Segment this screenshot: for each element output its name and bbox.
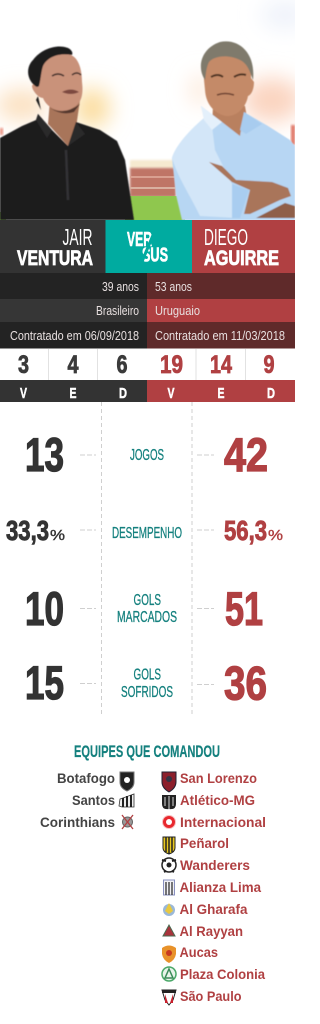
name: Jair Ventura bbox=[17, 224, 93, 270]
hire date bbox=[10, 329, 285, 343]
record numbers: Jair Ventura bbox=[18, 351, 128, 379]
nationality bbox=[96, 304, 200, 318]
record numbers: Jair Ventura: 3 bbox=[18, 351, 29, 379]
hire date: Contratado em 06/09/2018 bbox=[10, 329, 139, 343]
team: Botafogo: Botafogo bbox=[57, 770, 115, 786]
photo header: coaches over stadium bbox=[0, 1, 309, 220]
record numbers: Diego Aguirre: 14 bbox=[210, 351, 232, 379]
record numbers: Diego Aguirre: 19 bbox=[160, 351, 183, 379]
age bbox=[102, 280, 192, 294]
stat: desempenho: 33,3 bbox=[6, 515, 49, 546]
stat: gols sofridos: 36 bbox=[224, 656, 267, 710]
team: Al Rayyan: Al Rayyan bbox=[180, 923, 243, 939]
stat: desempenho: DESEMPENHO bbox=[112, 525, 182, 542]
stat: desempenho bbox=[6, 515, 283, 546]
name: Jair Ventura: VENTURA bbox=[17, 247, 93, 270]
team: Atlético-MG: Atlético-MG bbox=[180, 792, 255, 808]
record labels bbox=[20, 385, 275, 402]
team: Aucas bbox=[162, 944, 218, 963]
stat: gols marcados: 51 bbox=[225, 582, 263, 635]
record labels: V bbox=[20, 385, 27, 402]
stat: gols marcados: MARCADOS bbox=[117, 609, 177, 626]
record labels: E bbox=[218, 385, 224, 402]
photo: Jair Ventura bbox=[0, 46, 134, 220]
versus badge bbox=[127, 228, 168, 266]
record labels: E bbox=[70, 385, 76, 402]
stat: gols sofridos: 15 bbox=[25, 656, 64, 709]
versus badge: VER bbox=[127, 229, 152, 251]
stat: gols marcados: 10 bbox=[25, 582, 64, 635]
stadium background bbox=[0, 1, 309, 220]
stat: gols marcados: GOLS bbox=[134, 592, 161, 609]
record numbers: Diego Aguirre bbox=[160, 351, 274, 379]
record labels: V bbox=[168, 385, 174, 402]
team: Plaza Colonia: Plaza Colonia bbox=[180, 966, 265, 982]
nationality: Uruguaio bbox=[155, 304, 200, 318]
team: San Lorenzo: San Lorenzo bbox=[180, 770, 257, 786]
record numbers: Diego Aguirre: 9 bbox=[264, 351, 274, 379]
team: Alianza Lima: Alianza Lima bbox=[180, 879, 261, 895]
record labels: D bbox=[119, 385, 127, 402]
stat: desempenho: 56,3 bbox=[224, 515, 267, 546]
team: Peñarol bbox=[163, 835, 229, 854]
stat: gols sofridos: GOLS bbox=[134, 666, 161, 684]
team list: Jair Ventura bbox=[40, 770, 134, 830]
team: Aucas: Aucas bbox=[180, 944, 218, 960]
age: 53 anos bbox=[155, 280, 192, 294]
team: Internacional: Internacional bbox=[180, 814, 266, 830]
versus badge: SUS bbox=[142, 244, 168, 266]
team: São Paulo: São Paulo bbox=[180, 988, 242, 1004]
stat: jogos: JOGOS bbox=[130, 447, 164, 464]
stat: desempenho: % bbox=[50, 527, 65, 544]
stat: gols sofridos: SOFRIDOS bbox=[121, 684, 173, 701]
team: São Paulo bbox=[162, 988, 242, 1005]
name: Diego Aguirre: DIEGO bbox=[204, 224, 248, 250]
team: Peñarol: Peñarol bbox=[180, 835, 229, 851]
record numbers: Jair Ventura: 4 bbox=[68, 351, 79, 379]
name banner bbox=[0, 220, 295, 273]
nationality: Brasileiro bbox=[96, 304, 139, 318]
heading: teams coached: EQUIPES QUE COMANDOU bbox=[74, 743, 220, 761]
team: Santos: Santos bbox=[72, 792, 115, 808]
stat: desempenho: % bbox=[268, 527, 283, 544]
team: Wanderers: Wanderers bbox=[180, 857, 250, 873]
stat: jogos: 42 bbox=[224, 428, 268, 481]
age: 39 anos bbox=[102, 280, 139, 294]
biography table bbox=[0, 273, 295, 348]
record numbers: Jair Ventura: 6 bbox=[116, 351, 128, 379]
team: Al Gharafa: Al Gharafa bbox=[180, 901, 248, 917]
name: Diego Aguirre bbox=[204, 224, 279, 270]
stat: gols marcados bbox=[25, 582, 263, 635]
win, draw, loss record bbox=[0, 349, 295, 402]
team: Corinthians: Corinthians bbox=[40, 814, 115, 830]
record labels: D bbox=[267, 385, 275, 402]
team: San Lorenzo bbox=[162, 770, 257, 792]
photo: Diego Aguirre bbox=[172, 41, 295, 220]
name: Jair Ventura: JAIR bbox=[62, 224, 92, 250]
team list: Diego Aguirre bbox=[162, 770, 266, 1005]
stat: jogos bbox=[25, 428, 268, 481]
stat: gols sofridos bbox=[25, 656, 267, 710]
stat: jogos: 13 bbox=[25, 428, 64, 481]
